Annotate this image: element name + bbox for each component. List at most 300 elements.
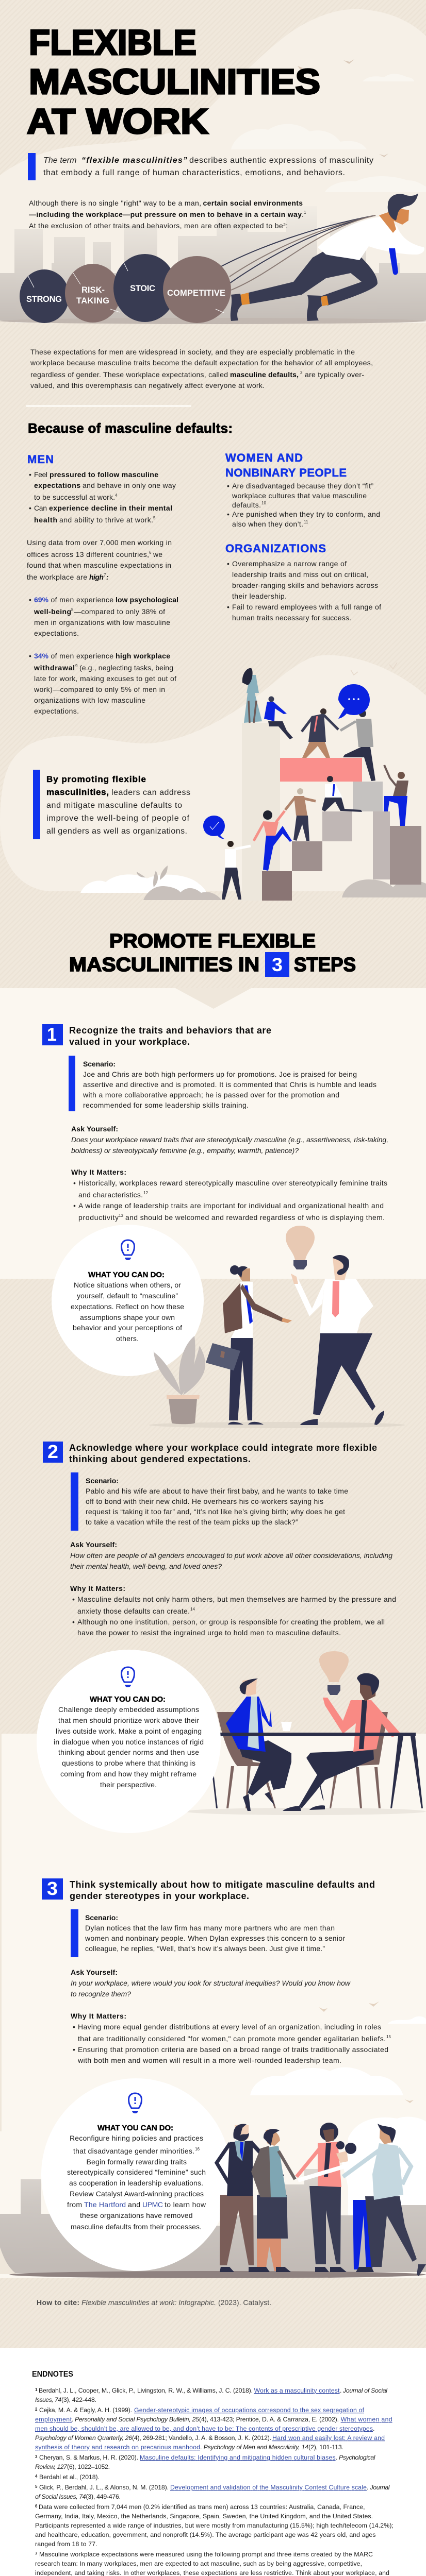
step 3 why it matters <box>71 2012 391 2064</box>
endnote 6: Participants represented a wide range of industries, but were mostly from manufacturing (15.5%); high tech/telecom (14.2%); <box>35 2522 394 2529</box>
endnote 2: Personality and Social Psychology Bulletin, 25 <box>75 2416 199 2423</box>
lower hill background <box>0 655 426 893</box>
step 3 why it matters: with both men and women will result in a more well-rounded leadership team. <box>77 2056 341 2064</box>
step 2 heading: thinking about gendered expectations. <box>69 1454 251 1464</box>
men bullets: 4 <box>115 493 118 498</box>
endnote 2: What women and <box>341 2416 392 2423</box>
step 2 ask yourself: How often are people of all genders encouraged to put work above all other considerations, including <box>70 1551 392 1560</box>
step 2 why it matters: anxiety those defaults can create. <box>77 1607 190 1615</box>
callout: what you can do 1: others. <box>116 1334 139 1343</box>
callout: what you can do 3: these organizations have removed <box>80 2211 193 2219</box>
lightbulb 2 <box>319 1651 349 1695</box>
callout: what you can do 3: and <box>128 2200 140 2209</box>
illustration: man pulling boulders <box>20 193 424 323</box>
boulder: risk-taking: RISK- <box>81 285 105 295</box>
speech bubble: ellipsis <box>338 684 370 719</box>
step 2 ask yourself <box>70 1540 392 1570</box>
heading: promote flexible masculinities in 3 steps: MASCULINITIES IN <box>69 954 259 976</box>
callout: by promoting flexible masculinities: masculinities, <box>46 787 109 797</box>
callout: by promoting flexible masculinities: By promoting flexible <box>46 774 146 784</box>
step 2 scenario: off to bond with their new child. He overhears his co-workers saying his <box>86 1497 323 1505</box>
speech bubble: checkmark <box>203 816 225 839</box>
step 3 ask yourself: Ask Yourself: <box>71 1968 118 1976</box>
step 1 why it matters: productivity <box>78 1213 119 1222</box>
women bullets: 10 <box>261 501 266 505</box>
endnote 2: employment <box>35 2416 72 2423</box>
organizations bullets: Overemphasize a narrow range of <box>232 560 347 568</box>
women bullets: Are punished when they try to conform, and <box>232 510 380 518</box>
step 1 why it matters: • <box>73 1179 76 1187</box>
step 2 <box>43 1441 396 1637</box>
stat: 34 percent: high workplace <box>116 652 170 660</box>
women bullets: 11 <box>304 520 308 524</box>
illustration: coworkers with lightbulb <box>149 1226 405 1428</box>
stat: 69 percent: • <box>29 596 31 604</box>
endnote 5: Glick, P., Berdahl, J. L., & Alonso, N. M. (2018). <box>39 2484 169 2491</box>
callout: what you can do 2: thinking about gender norms and then use <box>58 1748 199 1756</box>
endnote 2: synthesis of theory and research on precarious manhood <box>35 2444 200 2451</box>
endnote 3: . <box>336 2454 337 2461</box>
callout: what you can do 3: 16 <box>195 2147 200 2151</box>
men bullets: 5 <box>153 516 156 520</box>
callout: what you can do 3: Reconfigure hiring policies and practices <box>70 2134 203 2142</box>
step 1 why it matters: • <box>73 1201 76 1210</box>
man in suit <box>302 708 338 758</box>
endnote 5: . <box>367 2484 368 2491</box>
endnote 2: (4), 269-281; Vandello, J. A. & Bosson, J. K. (2012). <box>132 2434 271 2442</box>
step 1 ask yourself: Ask Yourself: <box>71 1125 118 1133</box>
step 3 ask yourself <box>71 1968 351 1998</box>
endnote 1: Berdahl, J. L., Cooper, M., Glick, P., Livingston, R. W., & Williams, J. C. (2018). <box>39 2387 253 2394</box>
step 3 why it matters: Ensuring that promotion criteria are based on a broad range of traits traditionally associated <box>78 2045 388 2054</box>
endnote 4: 4 <box>35 2474 38 2479</box>
step number 2 <box>43 1441 63 1463</box>
men research text: the workplace are <box>27 573 87 581</box>
plant sprigs <box>137 866 168 887</box>
title: AT WORK <box>27 101 208 141</box>
callout: what you can do 2: Challenge deeply embedded assumptions <box>58 1705 199 1714</box>
callout: what you can do 3: UPMC <box>142 2200 163 2209</box>
women bullets: workplace cultures that value masculine <box>232 492 367 500</box>
step 1 heading: Recognize the traits and behaviors that are <box>69 1025 271 1036</box>
stat: 69 percent: low psychological <box>116 596 178 604</box>
endnote 1: . <box>340 2387 341 2394</box>
callout: what you can do 3: stereotypically considered “feminine” such <box>67 2168 206 2176</box>
men research text: high <box>89 573 104 581</box>
stat: 34 percent: • <box>29 652 31 660</box>
endnote 5: Development and validation of the Masculinity Contest Culture scale <box>170 2484 367 2491</box>
step number 3: 3 <box>47 1878 58 1899</box>
organizations bullets <box>227 560 381 622</box>
heading: promote flexible masculinities in 3 steps: 3 <box>272 954 283 975</box>
callout: what you can do 2: WHAT YOU CAN DO: <box>90 1695 166 1704</box>
callout: what you can do 3: to learn how <box>165 2200 206 2209</box>
men bullets: pressured to follow masculine <box>50 470 158 479</box>
callout: what you can do 2: questions to probe where that thinking is <box>62 1759 195 1767</box>
table legs <box>212 1736 423 1808</box>
man in white shirt <box>222 841 251 900</box>
endnote 2: Psychology of Women Quarterly, 26 <box>35 2434 132 2442</box>
step 2 why it matters: Masculine defaults not only harm others, but men themselves are harmed by the pressure and <box>77 1595 396 1603</box>
men research text <box>27 538 172 581</box>
step 2 heading <box>69 1443 377 1464</box>
step 1 why it matters: Why It Matters: <box>71 1168 126 1176</box>
person in light blue shirt <box>343 2124 426 2276</box>
step 3 why it matters: • <box>73 2023 75 2031</box>
boulder: competitive: COMPETITIVE <box>167 289 225 298</box>
callout: what you can do 3: that disadvantage gender minorities. <box>73 2147 194 2155</box>
paragraph: masculine defaults explanation: These expectations for men are widespread in society, and they are especially problematic in the <box>30 348 355 356</box>
step 2 why it matters: • <box>72 1618 75 1626</box>
definition callout: “flexible masculinities” <box>81 156 187 165</box>
organizations bullets: leadership traits and miss out on critical, <box>232 570 368 579</box>
step 3 scenario: colleague, he replies, “Well, that’s how it’s always been. Just give it time.” <box>85 1944 325 1953</box>
stat: 34 percent <box>29 652 176 715</box>
endnote 1: Work as a masculinity contest <box>254 2387 340 2394</box>
definition callout <box>28 153 373 180</box>
paragraph: masculine defaults explanation: valued, and this overemphasis can negatively affect everyone at work. <box>30 381 265 389</box>
icon: lightbulb <box>122 1667 134 1687</box>
intro paragraph: At the exclusion of other traits and behaviors, men are often expected to be²: <box>29 222 288 230</box>
step 1 heading: valued in your workplace. <box>69 1037 190 1047</box>
heading: promote flexible masculinities in 3 steps <box>69 930 356 977</box>
chairs <box>217 1712 388 1808</box>
endnote 2: Gender-stereotypic images of occupations correspond to the sex segregation of <box>134 2406 365 2414</box>
callout: what you can do 2: coming from and how they might reframe <box>60 1770 196 1778</box>
callout: what you can do 3: Review Catalyst Award-winning practices <box>70 2190 204 2198</box>
organizations bullets: • <box>227 560 230 568</box>
organizations bullets: human traits necessary for success. <box>232 614 351 622</box>
bottom sky, clouds and city <box>0 2002 426 2278</box>
men research text: Using data from over 7,000 men working in <box>27 538 172 547</box>
step 2 why it matters: Why It Matters: <box>70 1584 125 1592</box>
men bullets: to be successful at work. <box>34 493 115 501</box>
older man <box>285 788 316 841</box>
heading: organizations: ORGANIZATIONS <box>225 542 326 555</box>
endnote 5 <box>35 2484 390 2500</box>
endnote 3: Psychological <box>339 2454 376 2461</box>
step 2 scenario: to take a vacation while the rest of the team picks up the slack?” <box>86 1518 298 1526</box>
endnote 1: Issues, 74 <box>35 2396 61 2403</box>
endnote 5: Journal <box>369 2484 390 2491</box>
paragraph: masculine defaults explanation: masculine defaults, <box>230 370 299 379</box>
step 2 why it matters: 14 <box>190 1607 195 1612</box>
endnote 6 <box>35 2503 394 2548</box>
paragraph: masculine defaults explanation: regardless of gender. These workplace expectations, called <box>30 370 228 379</box>
step 2 ask yourself: Ask Yourself: <box>70 1540 117 1549</box>
callout: what you can do 1: WHAT YOU CAN DO: <box>88 1270 165 1279</box>
endnote 1: (3), 422-448. <box>61 2396 96 2403</box>
step 3 scenario: Dylan notices that the law firm has many more partners who are men than <box>85 1924 335 1932</box>
seated man in blue <box>264 697 293 739</box>
stat: 69 percent: 69% <box>34 596 49 604</box>
title: FLEXIBLE <box>29 23 196 62</box>
title <box>27 23 320 141</box>
boulder: stoic <box>113 254 176 322</box>
boulder: risk-taking <box>65 264 121 323</box>
definition callout: describes authentic expressions of masculinity <box>189 156 373 165</box>
callout: what you can do 3: The Hartford <box>84 2200 126 2209</box>
stat: 34 percent: (e.g., neglecting tasks, being <box>79 664 173 672</box>
endnote 7 <box>35 2551 394 2576</box>
heading: promote flexible masculinities in 3 steps: PROMOTE FLEXIBLE <box>109 930 316 952</box>
callout: what you can do 3: as cooperation in leadership evaluations. <box>69 2179 203 2187</box>
endnote 2: men should be, shouldn’t be, are allowed to be, and don’t have to be: The contents of prescriptive gender stereotypes <box>35 2425 373 2432</box>
stat: 69 percent: men in organizations with low masculine <box>34 618 170 626</box>
callout: by promoting flexible masculinities: and mitigate masculine defaults to <box>46 801 182 810</box>
callout: by promoting flexible masculinities <box>33 770 190 839</box>
illustration: team hands together <box>217 2123 426 2276</box>
heading: promote flexible masculinities in 3 steps: STEPS <box>294 954 356 976</box>
organizations bullets: broader-ranging skills and behaviors across <box>232 581 378 589</box>
callout: what you can do 2: lives outside work. Make a point of engaging <box>56 1727 202 1735</box>
stat: 69 percent: 8 <box>71 607 74 612</box>
lightbulb 1 <box>286 1226 315 1269</box>
endnotes <box>35 2387 394 2576</box>
callout: what you can do 1 <box>52 1225 204 1376</box>
man in blazer <box>217 2124 283 2272</box>
intro paragraph: 1 <box>304 210 306 215</box>
icon: lightbulb <box>129 2093 141 2113</box>
panel: men <box>27 453 178 715</box>
men research text: 6 <box>149 550 152 555</box>
boulder: strong: STRONG <box>26 295 62 304</box>
men research text: we <box>153 550 162 558</box>
callout: by promoting flexible masculinities: all genders as well as organizations. <box>46 827 187 836</box>
step 2 scenario: Scenario: <box>86 1477 119 1485</box>
panel: organizations <box>225 542 381 622</box>
stat: 34 percent: 34% <box>34 652 49 660</box>
woman in dress <box>242 668 262 723</box>
endnote 1: Journal of Social <box>342 2387 388 2394</box>
men research text: found that when masculine expectations in <box>27 561 171 569</box>
endnote 5: of Social Issues, 74 <box>35 2493 86 2500</box>
step 1 why it matters: 12 <box>143 1191 148 1195</box>
women bullets: • <box>227 482 230 490</box>
ground shadow <box>0 318 426 324</box>
step 1 scenario: with a more collaborative approach; he is passed over for the promotion and <box>83 1091 339 1099</box>
men bullets <box>29 470 176 524</box>
stat: 34 percent: 9 <box>75 664 78 668</box>
step 1 scenario: assertive and directive and is promoted. It is commented that Chris is humble and leads <box>83 1080 376 1089</box>
woman right with blue pants <box>384 765 408 826</box>
how to cite: (2023). Catalyst. <box>218 2298 271 2307</box>
hero hill and clouds <box>0 9 426 323</box>
step 2 why it matters <box>70 1584 396 1637</box>
callout: what you can do 1: yourself, default to “masculine” <box>77 1292 178 1300</box>
endnote 2: Psychology of Men and Masculinity, 14 <box>204 2444 308 2451</box>
cup <box>281 1722 292 1731</box>
panel: women and nonbinary people <box>225 451 380 528</box>
stat: 69 percent: of men experience <box>51 596 113 604</box>
stat: 34 percent: late for work, making excuses to get out of <box>34 674 176 683</box>
step 2 ask yourself: their mental health, well-being, and loved ones? <box>70 1562 222 1570</box>
endnote 7: research team: In many workplaces, men are expected to act masculine, such as by being aggressive, competitive, <box>35 2560 362 2567</box>
person with headscarf <box>251 2129 295 2272</box>
endnote 2 <box>35 2406 392 2451</box>
stat: 69 percent: expectations. <box>34 629 79 637</box>
women bullets: also when they don’t. <box>232 520 303 528</box>
intro paragraph: —including the workplace—put pressure on men to behave in a certain way <box>29 210 302 218</box>
step 3 scenario <box>71 1909 345 1957</box>
organizations bullets: • <box>227 603 230 611</box>
person climbing top right <box>340 710 375 781</box>
step 1 ask yourself: Does your workplace reward traits that are stereotypically masculine (e.g., assertiveness, risk-taking, <box>71 1136 388 1144</box>
step 2 heading: Acknowledge where your workplace could integrate more flexible <box>69 1443 377 1453</box>
callout: what you can do 3: masculine defaults from their processes. <box>71 2223 202 2231</box>
men research text: : <box>106 573 109 581</box>
paragraph: masculine defaults explanation: are typically over- <box>305 370 364 379</box>
illustration: people helping each other climb stairs <box>137 668 426 901</box>
endnote 2: Hard won and easily lost: A review and <box>272 2434 385 2442</box>
step 1 <box>42 1024 388 1222</box>
person with afro <box>297 2123 347 2272</box>
arrow: chevron down <box>175 988 251 1009</box>
endnote 3: Cheryan, S. & Markus, H. R. (2020). <box>39 2454 138 2461</box>
woman in pink <box>254 810 292 871</box>
step 3 why it matters: Having more equal gender distributions at every level of an organization, including in roles <box>78 2023 381 2031</box>
step 3 why it matters: 15 <box>386 2035 391 2039</box>
men bullets: and behave in only one way <box>83 481 176 489</box>
how to cite <box>37 2298 271 2307</box>
kneeling woman <box>322 776 362 812</box>
endnote 2: 2 <box>35 2407 38 2412</box>
table top <box>220 1733 416 1736</box>
step number 1: 1 <box>47 1024 57 1045</box>
endnote 6: 6 <box>35 2504 38 2509</box>
boulder: strong <box>20 269 69 323</box>
person in white with blue pants <box>298 2141 374 2269</box>
men research text: offices across 13 different countries, <box>27 550 149 558</box>
endnote 3 <box>35 2454 376 2470</box>
step 1 why it matters <box>71 1168 387 1222</box>
person in blue jacket <box>226 1679 291 1811</box>
endnote 6: ranged from 18 to 77. <box>35 2540 97 2548</box>
step 2 why it matters: Although no one institution, person, or group is responsible for creating the problem, we all <box>77 1618 385 1626</box>
callout: what you can do 3: from <box>67 2200 82 2209</box>
man <box>231 193 424 321</box>
illustration: coworkers at table <box>185 1651 426 1815</box>
endnote 4: Berdahl et al., (2018). <box>39 2473 100 2481</box>
icon: lightbulb <box>122 1240 134 1260</box>
step 1 scenario <box>69 1056 376 1111</box>
step 1 why it matters: 13 <box>119 1213 123 1218</box>
step 1 heading <box>69 1025 271 1047</box>
boulder: risk-taking: TAKING <box>76 296 109 306</box>
heading: women and nonbinary people: NONBINARY PEOPLE <box>225 466 347 479</box>
women bullets <box>227 482 380 528</box>
callout: what you can do 3: WHAT YOU CAN DO: <box>97 2124 173 2132</box>
stat: 69 percent <box>29 596 178 637</box>
endnote 2: (2), 101-113. <box>308 2444 343 2451</box>
endnote 2: . <box>72 2416 73 2423</box>
stat: 69 percent: —compared to only 38% of <box>74 607 165 616</box>
step 3 why it matters: • <box>73 2045 75 2054</box>
woman with briefcase <box>206 1265 292 1425</box>
callout: what you can do 1: Notice situations when others, or <box>74 1281 181 1289</box>
men bullets: • <box>29 504 31 512</box>
heading: because of masculine defaults: Because of masculine defaults: <box>28 420 233 436</box>
callout: what you can do 1: expectations. Reflect on how these <box>71 1302 184 1311</box>
callout: what you can do 2: their perspective. <box>100 1781 157 1789</box>
intro paragraph: . <box>302 210 304 218</box>
paragraph: masculine defaults explanation <box>30 348 373 389</box>
step 3 why it matters: Why It Matters: <box>71 2012 126 2020</box>
step 3 ask yourself: In your workplace, where would you look for structural inequities? Would you know how <box>71 1979 351 1987</box>
heading: women and nonbinary people: WOMEN AND <box>225 451 303 464</box>
step 1 ask yourself: boldness) or stereotypically feminine (e.g., empathy, warmth, patience)? <box>71 1146 299 1155</box>
endnotes heading: ENDNOTES <box>32 2370 73 2379</box>
men bullets: Can <box>34 504 47 512</box>
callout: what you can do 2: that men should prioritize work above their <box>58 1716 199 1724</box>
ropes <box>221 215 375 290</box>
callout: what you can do 1: assumptions shape your own <box>80 1313 175 1321</box>
men bullets: • <box>29 470 31 479</box>
title: MASCULINITIES <box>29 62 320 101</box>
endnote 3: Review, 127 <box>35 2463 68 2470</box>
boulder: competitive <box>163 256 231 323</box>
endnote 3: 3 <box>35 2454 38 2459</box>
endnote 6: Germany, India, Italy, Mexico, the Netherlands, Singapore, Spain, Sweden, the United Kingdom, and the United States. <box>35 2513 373 2520</box>
step 1 why it matters: and characteristics. <box>78 1191 143 1199</box>
organizations bullets: Fail to reward employees with a full range of <box>232 603 381 611</box>
how to cite: How to cite: <box>37 2298 79 2307</box>
plant <box>154 1336 205 1424</box>
endnote 2: (4), 413-423; Prentice, D. A. & Carranza, E. (2002). <box>199 2416 339 2423</box>
step 3 why it matters: that are traditionally considered "for women," can promote more gender egalitarian beliefs. <box>78 2035 386 2043</box>
paragraph: masculine defaults explanation: 3 <box>300 370 303 375</box>
callout: what you can do 2 <box>37 1650 221 1833</box>
men bullets: expectations <box>34 481 80 489</box>
step 1 why it matters: Historically, workplaces reward stereotypically masculine over stereotypically feminine traits <box>78 1179 387 1187</box>
endnote 7: Masculine workplace expectations were measured using the following prompt and three items created by the MARC <box>39 2551 373 2558</box>
intro paragraph: certain social environments <box>203 199 303 207</box>
callout: what you can do 1: behavior and your perceptions of <box>73 1324 182 1332</box>
men bullets: health <box>34 516 57 524</box>
step 3 <box>42 1878 391 2064</box>
step 2 why it matters: have the power to resist the ingrained urge to hold men to masculine defaults. <box>77 1629 341 1637</box>
man gesturing <box>291 1255 384 1425</box>
men bullets: Feel <box>34 470 47 479</box>
stat: 34 percent: expectations. <box>34 707 79 715</box>
men bullets: and ability to thrive at work. <box>59 516 153 524</box>
callout: what you can do 3: Begin formally rewarding traits <box>87 2158 187 2166</box>
endnote 2: . <box>200 2444 202 2451</box>
endnote 3: Masculine defaults: Identifying and mitigating hidden cultural biases <box>140 2454 336 2461</box>
endnote 6: Data were collected from 7,044 men (0.2% identified as trans men) across 13 countries: Australia, Canada, France, <box>39 2503 365 2511</box>
women bullets: Are disadvantaged because they don’t “fit” <box>232 482 373 490</box>
step 1 why it matters: A wide range of leadership traits are important for individual and organizational health and <box>78 1201 384 1210</box>
boulder: stoic: STOIC <box>130 284 155 293</box>
callout: what you can do 2: in dialogue when you notice instances of rigid <box>54 1738 204 1746</box>
step 3 heading: gender stereotypes in your workplace. <box>70 1891 249 1901</box>
endnote 6: and healthcare, education, government, and nonprofit (14.5%). The average participant age was 42 years old, and ages <box>35 2531 375 2538</box>
endnote 5: (3), 449-476. <box>86 2493 121 2500</box>
endnote 7: 7 <box>35 2551 38 2556</box>
step 1 scenario: Scenario: <box>83 1060 116 1068</box>
stat: 34 percent: of men experience <box>51 652 113 660</box>
women bullets: • <box>227 510 230 518</box>
organizations bullets: their leadership. <box>232 592 287 600</box>
step number 3 <box>42 1878 63 1900</box>
men bullets: experience decline in their mental <box>49 504 172 512</box>
stat: 34 percent: withdrawal <box>34 664 75 672</box>
callout: by promoting flexible masculinities: leaders can address <box>111 788 190 797</box>
stat: 34 percent: work)—compared to only 5% of men in <box>34 685 165 693</box>
endnote 1 <box>35 2387 388 2403</box>
endnote 1: 1 <box>35 2387 38 2392</box>
step 3 heading: Think systemically about how to mitigate masculine defaults and <box>70 1879 375 1890</box>
